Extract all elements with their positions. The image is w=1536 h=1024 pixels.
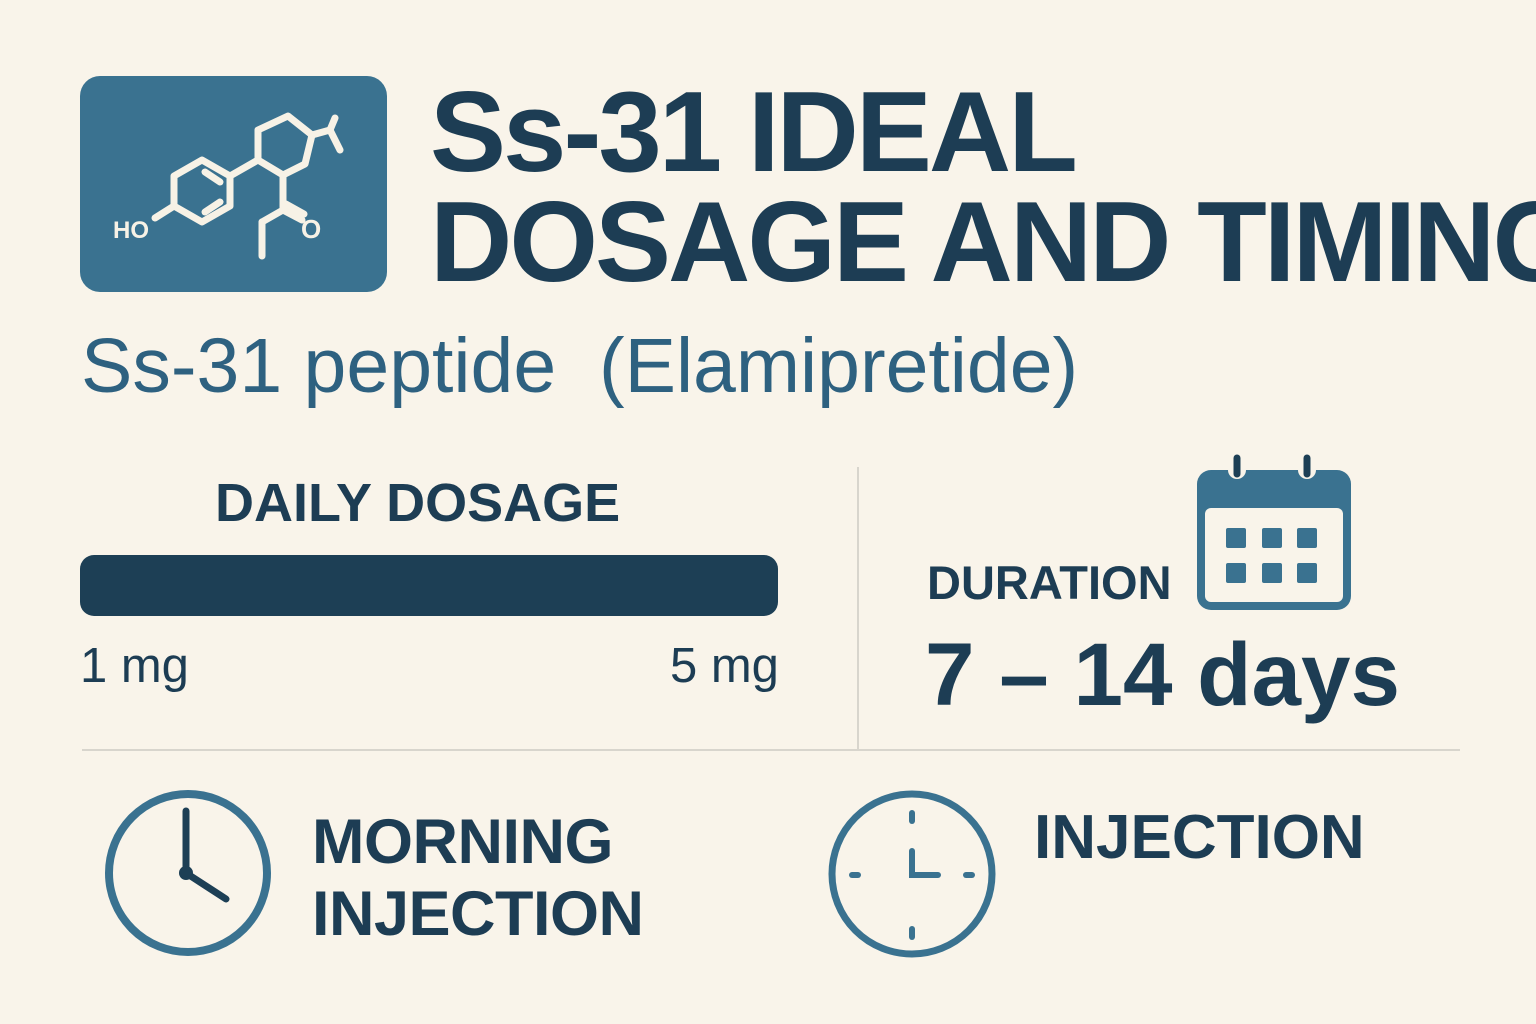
panel: daily dosage <box>80 473 779 693</box>
subtitle: Ss-31 peptide (Elamipretide) <box>81 323 1078 409</box>
label: morning injection: INJECTION <box>312 879 644 949</box>
panel: morning injection <box>105 790 644 956</box>
value: 7-14 days: 7 – 14 days <box>925 624 1400 724</box>
heading: daily dosage: DAILY DOSAGE <box>215 473 620 533</box>
panel: injection <box>828 790 1365 958</box>
label: injection: INJECTION <box>1034 803 1365 872</box>
icon: clock <box>828 790 996 958</box>
label: 5 mg: 5 mg <box>670 639 779 693</box>
icon: molecule <box>80 76 387 292</box>
icon: clock <box>105 790 271 956</box>
dosage bar <box>80 555 778 616</box>
label: morning injection: MORNING <box>312 807 613 877</box>
panel: duration <box>925 454 1400 724</box>
icon: calendar <box>1197 454 1351 610</box>
label: 1 mg: 1 mg <box>80 639 189 693</box>
icon: molecule: HO <box>113 217 149 244</box>
label: morning injection <box>312 807 644 949</box>
label: duration: DURATION <box>927 556 1172 609</box>
icon: molecule: O <box>301 214 321 244</box>
title <box>430 78 1536 298</box>
